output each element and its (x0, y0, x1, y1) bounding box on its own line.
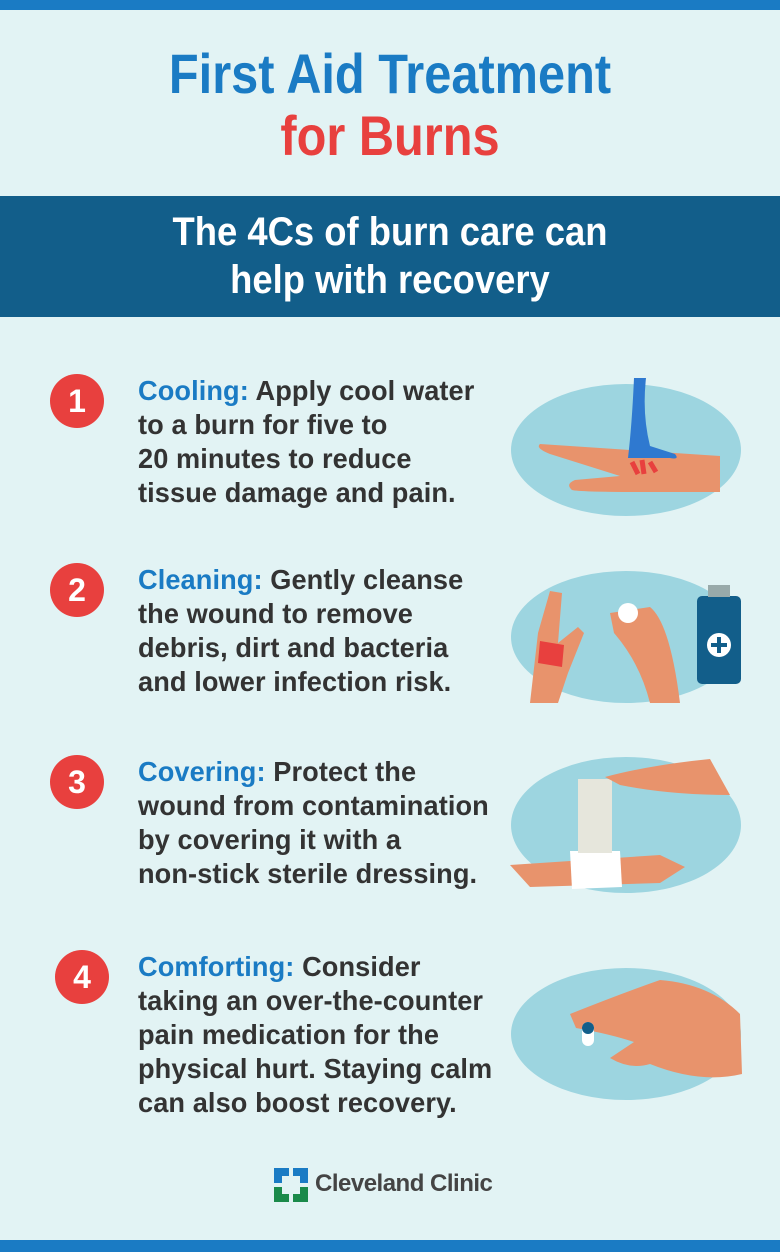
text: covering: Covering: Protect the (138, 756, 416, 787)
number badge 1: 1 (68, 383, 86, 419)
text: comforting: pain medication for the (138, 1019, 439, 1050)
text: cleaning: debris, dirt and bacteria (138, 632, 448, 663)
text: cooling: 20 minutes to reduce (138, 443, 412, 474)
subtitle band (0, 196, 780, 317)
text: cooling: tissue damage and pain. (138, 477, 456, 508)
number badge 1 (50, 374, 104, 428)
text: covering (138, 756, 489, 889)
bottom bar (0, 1240, 780, 1252)
number badge 2: 2 (68, 572, 86, 608)
text: comforting: physical hurt. Staying calm (138, 1053, 492, 1084)
text: covering: wound from contamination (138, 790, 489, 821)
number badge 4 (55, 950, 109, 1004)
text: comforting: Comforting: Consider (138, 951, 421, 982)
text: cleaning: Cleaning: Gently cleanse (138, 564, 463, 595)
subtitle band: help with recovery (230, 258, 550, 302)
text: covering: by covering it with a (138, 824, 401, 855)
icon: hand holding pill (511, 968, 742, 1100)
icon: bandaging arm (510, 757, 741, 893)
title: for Burns (280, 104, 500, 167)
title: First Aid Treatment (169, 42, 611, 105)
logo: Cleveland Clinic (274, 1168, 492, 1202)
text: cleaning: and lower infection risk. (138, 666, 451, 697)
text: covering: non-stick sterile dressing. (138, 858, 477, 889)
number badge 3 (50, 755, 104, 809)
text: cooling: to a burn for five to (138, 409, 388, 440)
text: comforting: can also boost recovery. (138, 1087, 457, 1118)
number badge 3: 3 (68, 764, 86, 800)
text: cleaning: the wound to remove (138, 598, 413, 629)
logo: Cleveland Clinic: Cleveland Clinic (315, 1170, 492, 1197)
icon: hands with gauze and bottle (511, 571, 741, 703)
subtitle band: The 4Cs of burn care can (173, 210, 607, 254)
text: comforting (138, 951, 492, 1118)
text: comforting: taking an over-the-counter (138, 985, 483, 1016)
step 2 (50, 563, 741, 703)
step 1 (50, 374, 741, 516)
number badge 2 (50, 563, 104, 617)
number badge 4: 4 (73, 959, 91, 995)
text: cleaning (138, 564, 463, 697)
step 4 (55, 950, 742, 1118)
text: cooling: Cooling: Apply cool water (138, 375, 474, 406)
top bar (0, 0, 780, 10)
icon: hand under water (511, 378, 741, 516)
text: cooling (138, 375, 474, 508)
title (169, 42, 611, 167)
step 3 (50, 755, 741, 893)
